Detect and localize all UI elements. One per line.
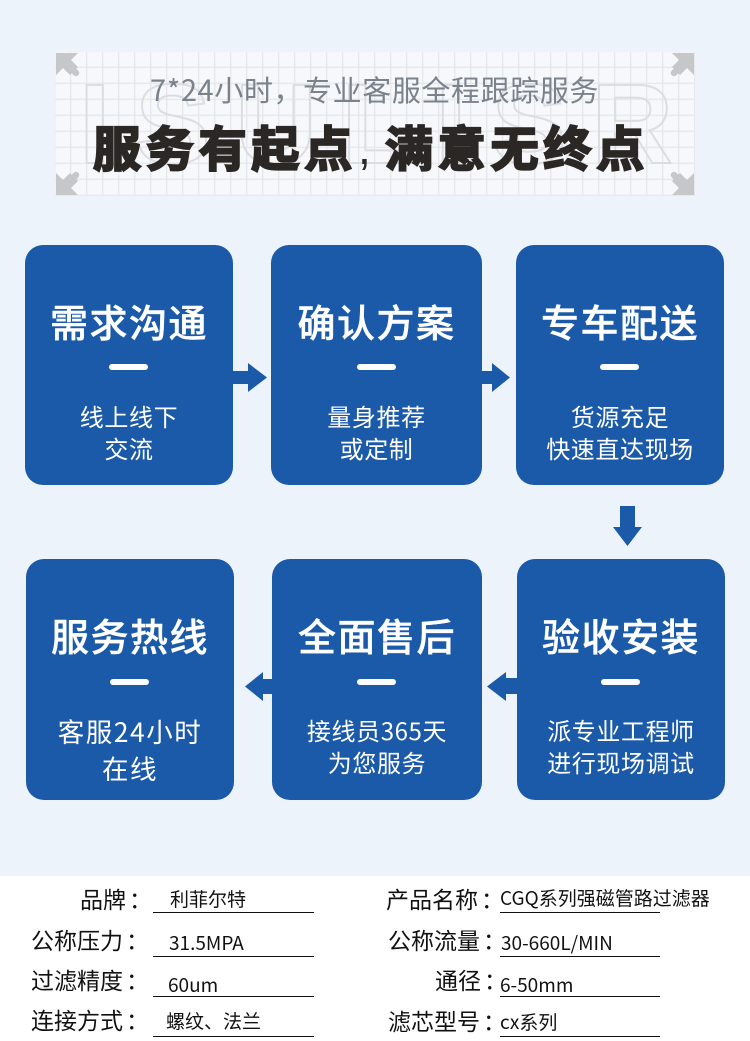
card: 确认方案 <box>271 245 482 485</box>
card: 服务热线: 在线 <box>102 748 158 787</box>
banner grid background: ISULISR <box>79 61 673 187</box>
spec: 通径 <box>435 962 660 998</box>
card: 需求沟通: 线上线下 <box>80 398 178 433</box>
spec: 产品名称 <box>386 881 710 915</box>
card: 专车配送: 货源充足 <box>571 398 669 433</box>
spec: 公称压力: 公称压力： <box>31 922 149 956</box>
arrow: step 5 to 6 <box>245 672 272 701</box>
spec: 产品名称: CGQ系列强磁管路过滤器 <box>500 884 710 911</box>
card: 全面售后: 为您服务 <box>328 744 426 779</box>
spec: 滤芯型号: cx系列 <box>500 1008 557 1035</box>
spec: 公称流量 <box>388 922 660 957</box>
card: 需求沟通 <box>25 245 233 485</box>
banner title right: 满意无终点 <box>385 110 649 180</box>
card: 专车配送 <box>516 245 724 485</box>
card: 验收安装: 派专业工程师 <box>547 712 695 747</box>
banner title left: 服务有起点 <box>93 110 357 180</box>
spec: 通径: 通径： <box>435 962 507 996</box>
spec: 通径: 6-50mm <box>500 971 573 998</box>
spec: 连接方式 <box>31 1002 314 1037</box>
card: 确认方案: 或定制 <box>340 430 413 465</box>
card: 服务热线: 客服24小时 <box>58 711 202 750</box>
spec: 公称流量: 30-660L/MIN <box>501 929 613 956</box>
card: 验收安装: 进行现场调试 <box>547 744 695 779</box>
card: 全面售后: 全面售后 <box>298 607 456 662</box>
card: 专车配送: 快速直达现场 <box>546 430 694 465</box>
card: 确认方案: 确认方案 <box>297 293 456 348</box>
spec: 产品名称: 产品名称： <box>386 881 504 915</box>
card: 专车配送: 专车配送 <box>541 293 699 348</box>
spec: 滤芯型号 <box>388 1003 660 1037</box>
card: 确认方案: 量身推荐 <box>327 398 426 433</box>
arrow: step 4 to 5 <box>487 672 517 701</box>
card: 全面售后 <box>272 559 482 800</box>
spec: 公称流量: 公称流量： <box>388 922 506 956</box>
spec: 过滤精度 <box>31 962 314 998</box>
card: 服务热线: 服务热线 <box>51 607 209 662</box>
spec: 品牌: 品牌： <box>80 881 152 915</box>
card: 验收安装 <box>517 559 725 800</box>
spec: 滤芯型号: 滤芯型号： <box>388 1003 506 1037</box>
spec: 品牌: 利菲尔特 <box>170 885 246 912</box>
spec: 公称压力 <box>31 922 314 957</box>
card: 验收安装: 验收安装 <box>542 607 700 662</box>
spec: 过滤精度: 过滤精度： <box>31 962 149 996</box>
spec: 品牌 <box>80 881 314 915</box>
arrow: step 1 to 2 <box>233 363 267 392</box>
spec table <box>0 876 750 1041</box>
spec: 公称压力: 31.5MPA <box>169 929 244 956</box>
header banner <box>55 52 695 196</box>
spec: 连接方式: 螺纹、法兰 <box>166 1007 261 1034</box>
spec: 过滤精度: 60um <box>168 971 218 998</box>
banner subtitle: 7*24小时，专业客服全程跟踪服务 <box>150 68 599 110</box>
card: 需求沟通: 交流 <box>104 430 154 465</box>
card: 服务热线 <box>26 559 234 800</box>
spec: 连接方式: 连接方式： <box>31 1002 149 1036</box>
card: 需求沟通: 需求沟通 <box>50 293 208 348</box>
banner title comma: , <box>358 122 371 174</box>
arrow: step 3 to 4 <box>613 506 642 546</box>
card: 全面售后: 接线员365天 <box>307 712 447 747</box>
arrow: step 2 to 3 <box>482 363 510 392</box>
